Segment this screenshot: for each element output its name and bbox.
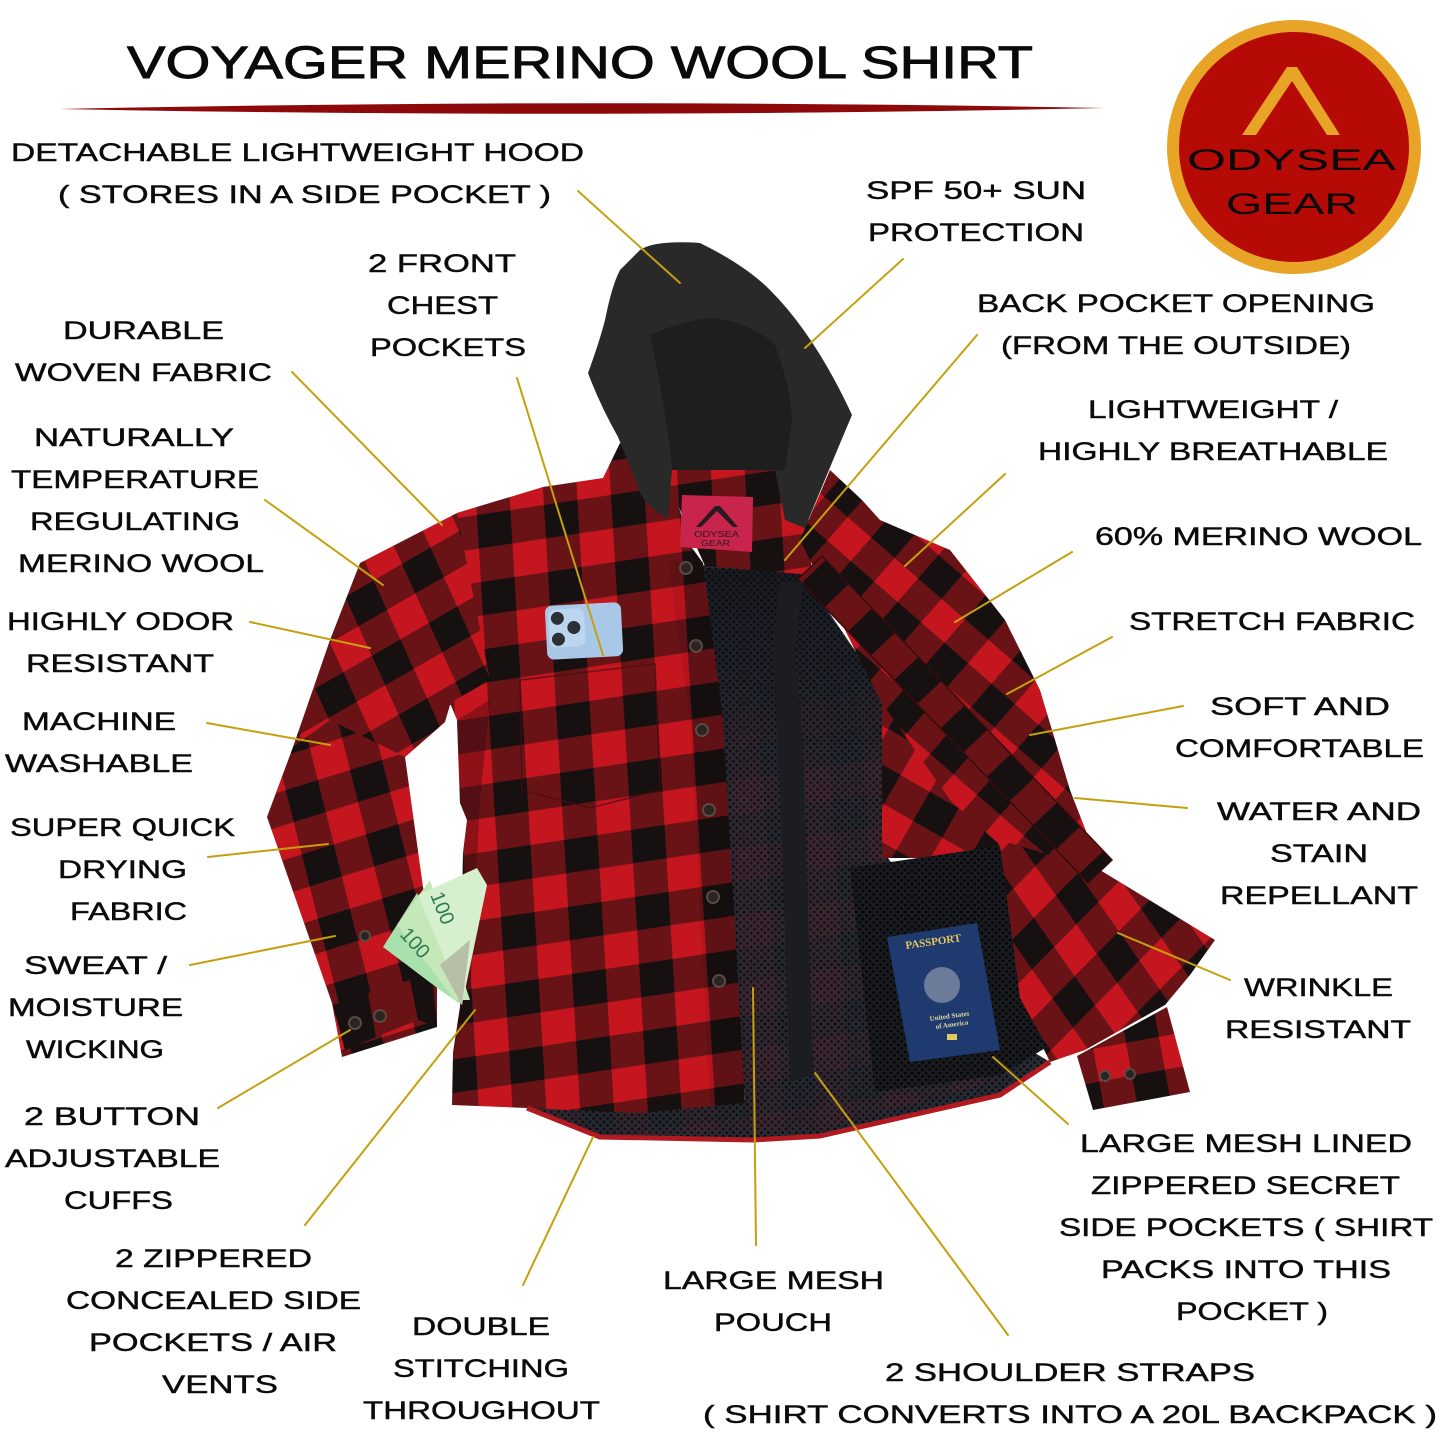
money in side pocket: 100 (425, 889, 458, 928)
callout: soft (1175, 693, 1424, 763)
callout: water repellant: STAIN (1270, 840, 1368, 868)
placket (668, 560, 745, 1106)
callout: back pocket: BACK POCKET OPENING (977, 290, 1375, 318)
logo: Odysea Gear badge: GEAR (1226, 188, 1358, 221)
chest pocket (520, 664, 660, 808)
callout: breathable: LIGHTWEIGHT / (1088, 396, 1338, 424)
callout: machine washable: WASHABLE (5, 750, 193, 778)
callout: wrinkle (1225, 974, 1411, 1044)
arrow: water repellant (1075, 798, 1187, 808)
arrow: cuffs (218, 1030, 350, 1108)
callout: mesh pouch (663, 1267, 884, 1337)
arrow: side pockets (305, 1010, 475, 1225)
callout: chest pockets: POCKETS (370, 334, 526, 362)
arrow: soft (1030, 706, 1183, 735)
arrow: wrinkle (1118, 933, 1230, 980)
callout: merino: 60% MERINO WOOL (1095, 523, 1422, 551)
callout: water repellant (1217, 798, 1421, 910)
right sleeve and shoulder (800, 470, 1105, 880)
callout: sun protection: SPF 50+ SUN (866, 177, 1086, 205)
callout: cuffs: 2 BUTTON (24, 1103, 200, 1131)
buttons (349, 562, 1135, 1081)
callout: secret pockets: ZIPPERED SECRET (1091, 1172, 1400, 1200)
callout: soft: SOFT AND (1210, 693, 1390, 721)
callout: temperature: MERINO WOOL (18, 550, 264, 578)
right cuff (1077, 1007, 1190, 1110)
callout: wicking: WICKING (26, 1036, 164, 1064)
callout: double stitching: STITCHING (393, 1355, 569, 1383)
callout: water repellant: REPELLANT (1220, 882, 1418, 910)
money in side pocket: 100 (395, 924, 434, 963)
callout: quick drying: DRYING (58, 856, 187, 884)
callout: odor (7, 608, 234, 678)
callout: durable (15, 317, 272, 387)
callout: wicking: SWEAT / (24, 952, 167, 980)
left sleeve (267, 640, 445, 1057)
arrow: merino (955, 552, 1072, 622)
callout: side pockets: 2 ZIPPERED (115, 1245, 312, 1273)
callout: side pockets: VENTS (162, 1371, 278, 1399)
shirt illustration (267, 242, 1215, 1140)
callout: shoulder straps (703, 1359, 1437, 1429)
callout: secret pockets: LARGE MESH LINED (1080, 1130, 1412, 1158)
callout: back pocket (977, 290, 1375, 360)
callout: durable: WOVEN FABRIC (15, 359, 272, 387)
callout: machine washable: MACHINE (22, 708, 176, 736)
callout: cuffs (5, 1103, 220, 1215)
phone in pocket (545, 602, 623, 660)
callout: wrinkle: RESISTANT (1225, 1016, 1411, 1044)
callout: detachable hood: ( STORES IN A SIDE POCKET ) (58, 181, 551, 209)
neck patch: GEAR (701, 539, 730, 548)
arrow: sun protection (805, 259, 903, 348)
mesh lining (527, 565, 1050, 1138)
callout: cuffs: CUFFS (64, 1187, 173, 1215)
callout: shoulder straps: 2 SHOULDER STRAPS (885, 1359, 1255, 1387)
arrow: machine washable (207, 723, 330, 745)
callout: secret pockets: SIDE POCKETS ( SHIRT (1059, 1214, 1433, 1242)
callout: side pockets (66, 1245, 361, 1399)
callout: quick drying: FABRIC (70, 898, 187, 926)
callout: side pockets: POCKETS / AIR (89, 1329, 337, 1357)
callout: detachable hood: DETACHABLE LIGHTWEIGHT HOOD (11, 139, 584, 167)
callout: quick drying: SUPER QUICK (10, 814, 235, 842)
title underline swoosh (60, 103, 1105, 114)
arrow: double stitching (523, 1137, 593, 1285)
callout: stretch: STRETCH FABRIC (1129, 608, 1415, 636)
shirt front body (450, 443, 745, 1113)
arrow: hood (578, 191, 680, 283)
callout: soft: COMFORTABLE (1175, 735, 1424, 763)
callout: sun protection (866, 177, 1086, 247)
arrow: breathable (905, 474, 1005, 566)
passport (887, 923, 1000, 1062)
logo: Odysea Gear badge (1167, 20, 1421, 274)
callout: machine washable (5, 708, 193, 778)
mesh side pocket (850, 846, 1047, 1092)
button placket on opened side (798, 556, 1112, 883)
arrow: quick drying (208, 844, 328, 857)
callout: temperature: TEMPERATURE (11, 466, 259, 494)
right lower flap (990, 840, 1215, 1062)
arrow: secret pockets (993, 1057, 1068, 1124)
callout: temperature: NATURALLY (34, 424, 234, 452)
shoulder (293, 500, 500, 757)
passport: United States (929, 1009, 970, 1023)
callout: chest pockets (368, 250, 526, 362)
callout: secret pockets: PACKS INTO THIS (1101, 1256, 1391, 1284)
callout: detachable hood (11, 139, 584, 209)
callout: breathable: HIGHLY BREATHABLE (1038, 438, 1388, 466)
callout: wrinkle: WRINKLE (1244, 974, 1393, 1002)
callout: double stitching (363, 1313, 600, 1425)
arrow: wicking (190, 936, 335, 965)
yoke and inner collar (660, 465, 812, 575)
callout: odor: RESISTANT (26, 650, 214, 678)
callout: wicking: MOISTURE (8, 994, 183, 1022)
neck patch: ODYSEA (694, 530, 740, 539)
left cuff (333, 975, 437, 1050)
callout: cuffs: ADJUSTABLE (5, 1145, 220, 1173)
logo: Odysea Gear badge: ODYSEA (1187, 144, 1396, 177)
callout: double stitching: DOUBLE (412, 1313, 550, 1341)
callout: durable: DURABLE (63, 317, 224, 345)
callout: mesh pouch: LARGE MESH (663, 1267, 884, 1295)
callout: sun protection: PROTECTION (868, 219, 1084, 247)
title: VOYAGER MERINO WOOL SHIRT (127, 37, 1033, 88)
callout: quick drying (10, 814, 235, 926)
callout: secret pockets (1059, 1130, 1433, 1326)
callout: shoulder straps: ( SHIRT CONVERTS INTO A 20L BACKPACK ) (703, 1401, 1437, 1429)
arrow: chest pockets (517, 378, 603, 655)
callout: mesh pouch: POUCH (714, 1309, 832, 1337)
callout: side pockets: CONCEALED SIDE (66, 1287, 361, 1315)
arrow: temperature (265, 500, 383, 585)
arrow: shoulder straps (815, 1073, 1008, 1335)
callout: wicking (8, 952, 183, 1064)
left side panel shadow (453, 700, 490, 1053)
hem (527, 1062, 1050, 1140)
callout: secret pockets: POCKET ) (1176, 1298, 1328, 1326)
shoulder strap (772, 582, 813, 1082)
callout: odor: HIGHLY ODOR (7, 608, 234, 636)
hood inner (650, 318, 792, 470)
arrow: durable (292, 372, 442, 525)
hood (588, 242, 852, 528)
neck patch (680, 495, 753, 552)
callout: double stitching: THROUGHOUT (363, 1397, 600, 1425)
inner front panel (878, 680, 1010, 858)
callout: breathable (1038, 396, 1388, 466)
callout: water repellant: WATER AND (1217, 798, 1421, 826)
money in side pocket (383, 868, 487, 1005)
passport: of America (935, 1018, 969, 1031)
arrow: back pocket (785, 335, 977, 560)
callout: chest pockets: 2 FRONT (368, 250, 516, 278)
arrow: mesh pouch (753, 988, 756, 1245)
callout: back pocket: (FROM THE OUTSIDE) (1001, 332, 1351, 360)
passport: PASSPORT (905, 932, 963, 952)
arrow: stretch (1007, 637, 1112, 694)
callout: temperature (11, 424, 264, 578)
callout: chest pockets: CHEST (387, 292, 498, 320)
callout: temperature: REGULATING (30, 508, 240, 536)
mesh upper shadow (705, 568, 882, 780)
arrow: odor (250, 622, 370, 648)
mesh red show-through (544, 712, 998, 1134)
